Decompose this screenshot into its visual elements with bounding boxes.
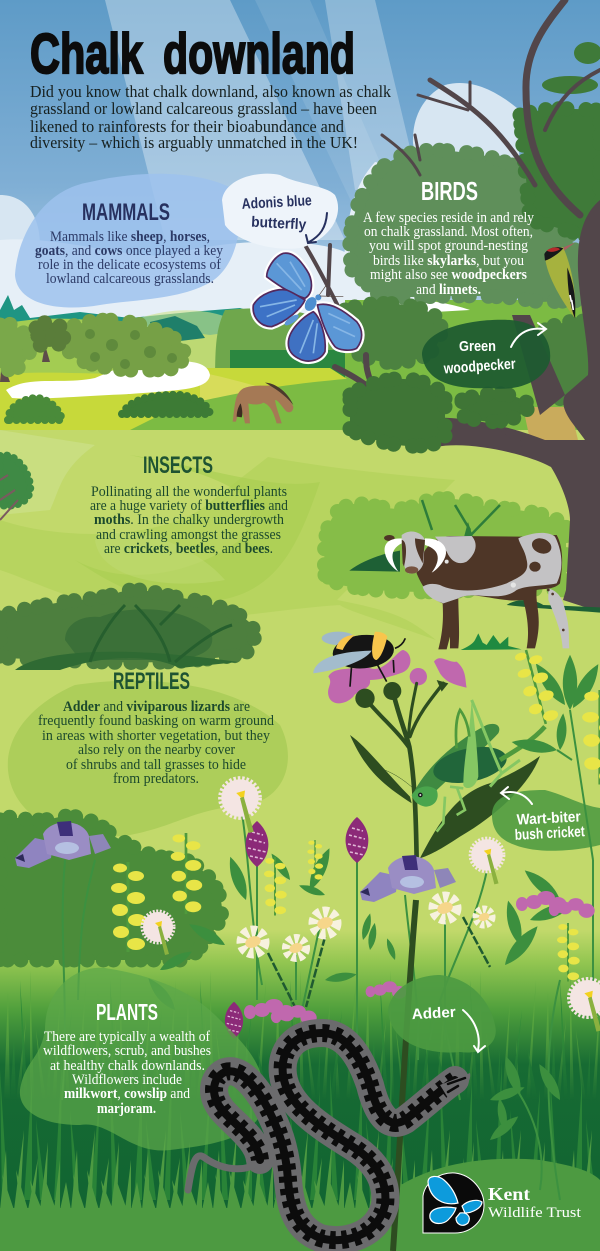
heading: insects: INSECTS <box>143 452 213 479</box>
heading: birds: BIRDS <box>421 176 478 206</box>
arrow: to adder <box>463 1010 485 1052</box>
heading: mammals: MAMMALS <box>82 199 170 226</box>
text: reptiles: Adder and viviparous lizards are <box>63 699 250 715</box>
heading: reptiles: REPTILES <box>113 668 190 695</box>
logo text: Kent <box>488 1184 530 1204</box>
scabious flowers <box>15 821 456 902</box>
text: plants: at healthy chalk downlands. <box>50 1058 205 1074</box>
bubble: green woodpecker <box>422 320 550 389</box>
text: insects: Pollinating all the wonderful plants <box>91 484 287 500</box>
text: reptiles: frequently found basking on warm ground <box>38 713 275 729</box>
wild plants: leaves <box>144 655 600 1144</box>
tree canopy <box>350 42 600 302</box>
bubble: reptiles <box>8 681 288 837</box>
arrow: to cricket <box>501 787 532 804</box>
label: green woodpecker: Green <box>459 338 496 355</box>
scrub on hill <box>65 320 185 370</box>
sky background <box>0 0 600 340</box>
tree branches <box>305 0 600 320</box>
meadow foreground <box>0 930 600 1251</box>
adder snake <box>188 1033 470 1240</box>
title <box>30 22 355 86</box>
label: wart-biter bush cricket: Wart-biter <box>516 808 581 829</box>
trunk and lower branches <box>335 200 600 612</box>
butterfly <box>253 253 362 361</box>
heading: plants: PLANTS <box>96 999 158 1025</box>
chalk cliff <box>6 361 210 399</box>
tree lower foliage <box>345 303 600 402</box>
text: reptiles: of shrubs and tall grasses to hide <box>66 757 246 773</box>
meadow ground <box>0 430 600 950</box>
logo: Kent Wildlife Trust <box>423 1173 484 1233</box>
text: reptiles: in areas with shorter vegetation, but they <box>42 728 271 744</box>
tree on left edge <box>0 455 30 520</box>
label: adonis blue butterfly: Adonis blue <box>241 192 312 213</box>
logo text: Wildlife Trust <box>488 1205 582 1221</box>
dark bush <box>0 590 254 670</box>
logo text <box>488 1184 582 1221</box>
small trees on left <box>0 322 64 382</box>
title: Chalk <box>30 22 143 86</box>
green woodpecker bird <box>544 243 575 318</box>
dandelion clocks <box>142 778 600 1032</box>
text: plants: milkwort, cowslip and <box>64 1086 191 1102</box>
yellow flower spikes <box>111 646 600 982</box>
cricket <box>380 700 545 832</box>
arrow: to woodpecker <box>511 323 546 347</box>
horse <box>233 383 293 423</box>
ground swirls <box>0 430 455 640</box>
fields <box>0 368 600 440</box>
orchids <box>225 817 368 1039</box>
label: wart-biter bush cricket <box>514 808 585 844</box>
distant trees and hills <box>0 295 600 420</box>
wild plants: stems <box>62 710 593 1200</box>
bush in meadow <box>0 816 222 960</box>
text: reptiles <box>38 699 275 787</box>
label: adonis blue butterfly <box>241 192 312 233</box>
text: plants <box>43 1029 211 1117</box>
text: birds <box>363 210 535 298</box>
intro text <box>30 82 392 152</box>
bubble: mammals <box>15 174 240 307</box>
daisies <box>243 898 491 956</box>
bubble: adder <box>388 975 496 1053</box>
text: birds: A few species reside in and rely <box>363 210 535 226</box>
text: birds: birds like skylarks, but you <box>373 253 524 269</box>
sun rays <box>105 0 420 240</box>
text: plants: There are typically a wealth of <box>44 1029 210 1045</box>
foreground grass <box>0 1130 600 1251</box>
text: mammals: role in the delicate ecosystems of <box>38 257 221 273</box>
clouds <box>0 83 520 330</box>
grass texture <box>4 973 600 1088</box>
cow <box>349 531 600 650</box>
text: birds: on chalk grassland. Most often, <box>364 224 533 240</box>
label: adonis blue butterfly: butterfly <box>251 214 307 233</box>
bubble: plants <box>20 968 265 1150</box>
daisy dark stems <box>268 917 490 1007</box>
text: reptiles: also rely on the nearby cover <box>78 742 235 758</box>
text: plants: wildflowers, scrub, and bushes <box>43 1043 211 1059</box>
text: mammals: goats, and cows once played a key <box>35 243 224 259</box>
text: mammals <box>35 229 224 287</box>
marjoram pink flowers <box>244 891 595 1025</box>
text: insects: are crickets, beetles, and bees. <box>104 541 273 557</box>
text: mammals: Mammals like sheep, horses, <box>50 229 210 245</box>
intro text: likened to rainforests for their bioabundance and <box>30 117 345 136</box>
bubble: wart-biter <box>492 790 600 851</box>
arrow: to butterfly <box>306 213 327 243</box>
text: birds: might also see woodpeckers <box>370 267 527 283</box>
intro text: grassland or lowland calcareous grassland – have been <box>30 99 377 118</box>
bush behind cow <box>324 499 566 592</box>
text: mammals: lowland calcareous grasslands. <box>46 271 214 287</box>
flower with bee and stem <box>313 632 540 860</box>
main dark stem <box>393 900 416 1251</box>
text: plants: Wildflowers include <box>72 1072 182 1088</box>
intro text: diversity – which is arguably unmatched in the UK! <box>30 133 358 152</box>
label: adder: Adder <box>411 1004 456 1023</box>
text: plants: marjoram. <box>97 1101 156 1117</box>
text: insects: moths. In the chalky undergrowth <box>94 512 285 528</box>
label: green woodpecker <box>442 338 516 378</box>
bubble: adonis blue label <box>222 174 338 249</box>
text: insects: and crawling amongst the grasses <box>96 527 281 543</box>
title: downland <box>163 22 355 86</box>
bushes near chalk <box>8 395 210 420</box>
text: birds: you will spot ground-nesting <box>369 238 528 254</box>
text: reptiles: from predators. <box>113 771 199 787</box>
intro text: Did you know that chalk downland, also known as chalk <box>30 82 392 101</box>
label: green woodpecker: woodpecker <box>442 356 516 378</box>
text: insects <box>90 484 289 557</box>
text: insects: are a huge variety of butterflies and <box>90 498 289 514</box>
text: birds: and linnets. <box>416 282 481 298</box>
